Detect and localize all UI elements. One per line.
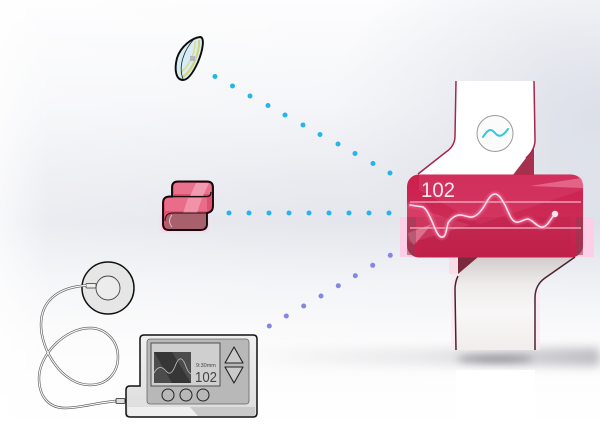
round buttons bbox=[162, 389, 209, 401]
watch shadow bbox=[457, 356, 533, 362]
insulin pump infusion set bbox=[39, 262, 257, 417]
glucose trace bbox=[410, 194, 555, 237]
pump device bbox=[116, 335, 257, 417]
tubing bbox=[39, 286, 118, 408]
pink side glow bbox=[400, 217, 594, 257]
icon: contact lens sensor bbox=[176, 37, 203, 80]
pump screen: 102 bbox=[195, 369, 217, 386]
upper strap bbox=[418, 81, 535, 175]
pump screen bbox=[151, 343, 220, 386]
smartwatch bbox=[400, 81, 594, 362]
dotted line: lens to watch bbox=[212, 74, 392, 176]
dotted line: patch to watch bbox=[226, 210, 392, 216]
control panel bbox=[147, 339, 249, 404]
pump screen: 9:30mm bbox=[196, 363, 216, 369]
icon: pink ribbon patch sensor bbox=[161, 182, 213, 232]
dotted line: pump to watch bbox=[267, 253, 393, 328]
watch display body bbox=[407, 174, 583, 258]
up and down arrow buttons bbox=[225, 347, 243, 383]
icon: wave badge bbox=[477, 116, 513, 152]
icon: infusion disc bbox=[82, 262, 134, 314]
lower strap bbox=[449, 257, 575, 350]
reading: 102 bbox=[421, 179, 455, 202]
guide lines bbox=[410, 202, 581, 228]
